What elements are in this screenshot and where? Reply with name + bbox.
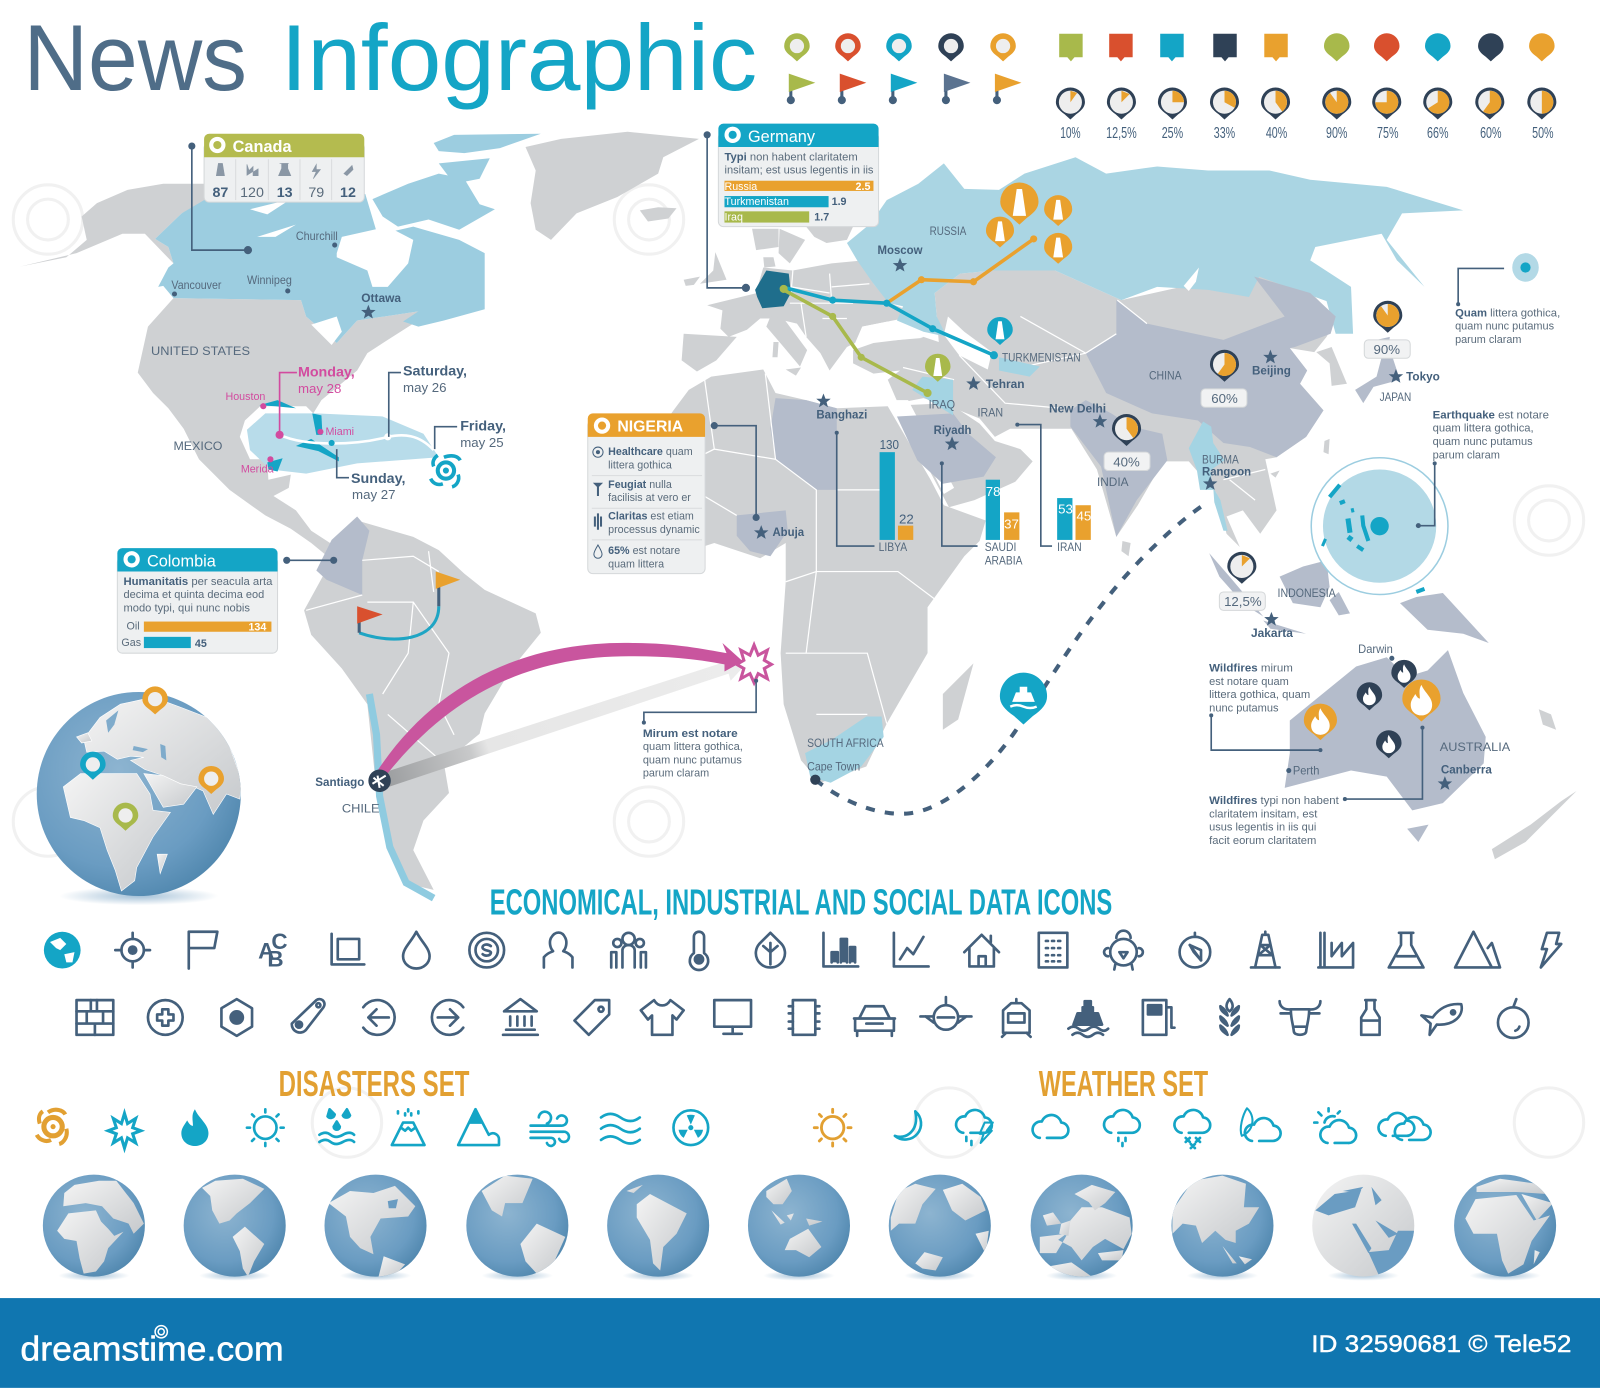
icon: ship pin xyxy=(1000,673,1047,725)
percentage labels xyxy=(1060,125,1554,142)
Wildfires text two: usus legentis in iis qui xyxy=(1209,822,1316,834)
title: Infographic xyxy=(281,5,757,110)
Quam text and marker xyxy=(1455,253,1560,346)
Germany bars: 1.7 xyxy=(814,212,829,224)
Canada header xyxy=(204,134,364,157)
country labels: AUSTRALIA xyxy=(1440,740,1511,754)
icon: car xyxy=(854,1006,895,1036)
Nigeria rows: quam littera xyxy=(608,558,664,570)
Wildfires text two: facit eorum claritatem xyxy=(1209,835,1316,847)
city labels: Houston xyxy=(226,391,265,403)
bar chart: Iran: 45 xyxy=(1077,509,1091,524)
icon: hurricane xyxy=(431,455,460,487)
bar chart: Iran: 53 xyxy=(1058,501,1073,516)
bar chart: Libya: LIBYA xyxy=(879,540,908,554)
Mirum text: Mirum est notare xyxy=(643,728,738,740)
country labels: TURKMENISTAN xyxy=(1002,350,1081,364)
Scandinavia xyxy=(752,229,779,250)
icon: chain xyxy=(292,999,324,1033)
icon: factory xyxy=(1318,933,1353,967)
Germany bars: Russia xyxy=(724,181,757,193)
grey straight arrow xyxy=(381,653,745,788)
country labels: RUSSIA xyxy=(930,224,967,238)
icon: target xyxy=(115,933,150,967)
dashed ship route xyxy=(815,505,1203,814)
percentage labels: 12,5% xyxy=(1106,125,1137,142)
Wildfires text one: est notare quam xyxy=(1209,676,1289,688)
bar chart: Iran: IRAN xyxy=(1057,540,1082,554)
Mirum text: parum claram xyxy=(643,768,709,780)
Nigeria rows xyxy=(592,446,702,570)
icon: bar chart xyxy=(823,933,858,966)
bar chart: Libya xyxy=(835,431,914,554)
Monday label: Monday, xyxy=(298,365,355,381)
Nigeria rows: littera gothica xyxy=(608,459,672,471)
Korea xyxy=(1316,347,1347,386)
globe: Europe xyxy=(1031,1175,1133,1281)
New Zealand xyxy=(1492,791,1577,859)
Colombia bars: 45 xyxy=(195,638,207,650)
map pie pins with values xyxy=(1104,301,1410,610)
percentage labels: 33% xyxy=(1214,125,1235,142)
Wildfires text two: Wildfires typi non habent xyxy=(1209,795,1340,807)
icon: globe xyxy=(44,932,81,968)
city labels: Rangoon xyxy=(1202,466,1251,479)
icon: house xyxy=(964,935,999,966)
Russia highlighted xyxy=(847,157,1463,337)
icon: fuel pump xyxy=(1143,1000,1174,1035)
percentage labels: 60% xyxy=(1480,125,1502,142)
icon: wheat xyxy=(1220,999,1239,1035)
icon: thunderstorm xyxy=(956,1110,993,1145)
Quam text and marker: Quam littera gothica, xyxy=(1455,307,1560,319)
land: grey continents xyxy=(20,132,1577,890)
Germany bars: 1.9 xyxy=(832,196,847,208)
Quam text and marker: quam nunc putamus xyxy=(1455,321,1554,333)
pink curved arrow xyxy=(378,643,743,780)
percentage labels: 50% xyxy=(1532,125,1554,142)
icon: bottle xyxy=(1361,1000,1380,1035)
globe: Africa xyxy=(1454,1175,1556,1281)
icon: apple xyxy=(1498,999,1529,1038)
filled drop markers xyxy=(1324,33,1555,61)
icon: thermometer xyxy=(690,932,708,970)
icon: double cloud xyxy=(1379,1113,1431,1140)
hurricane track xyxy=(226,364,506,502)
country labels: UNITED STATES xyxy=(151,344,250,358)
Germany callout: insitam; est usus legentis in iis xyxy=(724,165,874,177)
icon: hexagon xyxy=(221,999,252,1036)
icon: waves xyxy=(601,1114,640,1143)
icon: moon cloud xyxy=(1241,1108,1281,1141)
icon: cloud xyxy=(1033,1115,1068,1138)
icon: cow xyxy=(1280,1001,1320,1035)
city labels: Tehran xyxy=(986,378,1024,391)
Colombia bars: Gas xyxy=(121,637,141,649)
Saturday label: may 26 xyxy=(403,380,447,395)
country labels: SOUTH AFRICA xyxy=(807,736,884,750)
Canada highlighted xyxy=(155,134,541,343)
icon: train xyxy=(1002,999,1031,1037)
globe: North America xyxy=(324,1175,427,1281)
Germany bars: Iraq xyxy=(724,212,743,224)
Germany header xyxy=(718,124,879,147)
Hudson Bay and lakes xyxy=(250,199,413,345)
percentage labels: 25% xyxy=(1162,125,1183,142)
percentage pie pins xyxy=(1056,87,1556,119)
Mirum text xyxy=(642,679,758,780)
Colombia header: Colombia xyxy=(147,552,217,570)
capital stars xyxy=(361,258,1452,790)
Germany callout xyxy=(704,124,879,292)
Nigeria header xyxy=(588,413,705,437)
Germany panel body xyxy=(718,133,879,227)
country labels: CHINA xyxy=(1149,369,1182,383)
Canada stats: 79 xyxy=(308,185,324,201)
percentage labels: 40% xyxy=(1266,125,1288,142)
icon: hurricane xyxy=(37,1110,67,1144)
route flags South America xyxy=(357,572,460,639)
icon: lightning xyxy=(1541,933,1561,967)
footer logo mark xyxy=(155,1326,167,1338)
Canada stats: 120 xyxy=(240,185,264,201)
icon: airplane xyxy=(920,997,971,1030)
seas cut from land xyxy=(855,316,992,494)
Mirum text: quam nunc putamus xyxy=(643,754,742,766)
icon: alarm clock xyxy=(1104,931,1143,970)
Earthquake text: parum claram xyxy=(1433,449,1500,461)
icon: line chart xyxy=(894,933,929,966)
Canada header: Canada xyxy=(233,138,293,156)
Germany text: Typi non habent claritatem xyxy=(724,151,858,163)
footer id: ID 32590681 © Tele52 xyxy=(1311,1331,1571,1358)
city labels: Churchill xyxy=(296,229,338,243)
globe: Middle East xyxy=(1312,1175,1416,1281)
Saturday label: Saturday, xyxy=(403,364,467,380)
icon: snow xyxy=(1174,1110,1210,1148)
small globes row xyxy=(43,1175,1556,1281)
country labels: INDONESIA xyxy=(1278,586,1336,600)
footer xyxy=(0,1298,1600,1388)
globe: Americas xyxy=(184,1175,286,1281)
Chile xyxy=(369,694,434,898)
Nigeria rows: 65% est notare xyxy=(608,545,680,557)
Nigeria rows: Healthcare quam xyxy=(608,446,693,458)
icon: letters: B xyxy=(267,946,284,971)
Colombia header xyxy=(117,548,278,572)
Earthquake text: quam nunc putamus xyxy=(1433,436,1533,448)
Wildfires text two xyxy=(1209,726,1424,847)
country labels: INDIA xyxy=(1097,475,1129,489)
icon: mountain xyxy=(1455,932,1500,967)
Canada stats: 12 xyxy=(340,185,356,201)
Monday label: may 28 xyxy=(298,381,341,396)
Canada panel body xyxy=(204,143,364,202)
icon: avalanche xyxy=(458,1109,499,1145)
icon: wind xyxy=(531,1112,569,1146)
map pie pins with values: 60% xyxy=(1211,391,1238,406)
Friday label: may 25 xyxy=(460,435,504,450)
outline location pins xyxy=(784,33,1016,61)
percentage labels: 10% xyxy=(1060,125,1081,142)
bar chart: Libya: 130 xyxy=(880,437,899,452)
Nigeria header: NIGERIA xyxy=(617,419,683,436)
icon: explosion xyxy=(108,1113,141,1148)
bar chart: Saudi Arabia: SAUDI xyxy=(985,540,1016,554)
icon: sun cloud xyxy=(1314,1108,1356,1143)
country labels xyxy=(151,224,1511,815)
Earthquake text: quam littera gothica, xyxy=(1433,423,1534,435)
icon: leaf xyxy=(756,933,785,967)
icon: chip xyxy=(789,1000,819,1035)
bar chart: Saudi Arabia: 37 xyxy=(1004,517,1019,532)
percentage labels: 75% xyxy=(1377,125,1399,142)
Sunday label: may 27 xyxy=(352,487,395,502)
Germany header: Germany xyxy=(748,128,816,146)
Germany bars: 2.5 xyxy=(856,181,870,193)
Wildfires text one: nunc putamus xyxy=(1209,702,1279,714)
Saturday label xyxy=(389,364,467,437)
icon: t-shirt xyxy=(641,1000,684,1035)
icon: radiation xyxy=(673,1110,708,1145)
Friday label: Friday, xyxy=(460,419,506,435)
Turkmenistan, Iraq, Burma highlighted xyxy=(805,357,1228,783)
icon: money xyxy=(469,933,504,967)
Asia and Turkey base xyxy=(853,271,1337,547)
Germany xyxy=(755,271,791,308)
city labels: Ottawa xyxy=(361,292,402,305)
map pie pins with values: 90% xyxy=(1373,342,1400,357)
Wildfires text one: Wildfires mirum xyxy=(1209,663,1293,675)
globe: South America xyxy=(607,1175,709,1281)
Colombia panel xyxy=(117,548,337,653)
city labels: Darwin xyxy=(1358,642,1393,656)
icon: left arrow xyxy=(363,1000,395,1035)
disasters icons xyxy=(37,1109,708,1148)
city labels: Perth xyxy=(1293,764,1320,778)
globe pins xyxy=(80,686,224,831)
icon: water drop xyxy=(403,932,430,968)
icon: moon xyxy=(895,1111,921,1140)
icon: explosion star xyxy=(737,645,771,683)
icon: flood xyxy=(319,1109,354,1144)
city labels: Riyadh xyxy=(934,424,971,437)
icon: bricks xyxy=(77,1000,113,1035)
Sunday label xyxy=(337,449,405,502)
icon: volcano xyxy=(392,1109,424,1145)
title: News xyxy=(23,5,247,110)
bar chart: Libya: 22 xyxy=(899,512,914,527)
Canada callout xyxy=(188,134,364,254)
heading: disasters: DISASTERS SET xyxy=(279,1064,470,1104)
city labels xyxy=(171,229,1492,789)
icon: ship xyxy=(1068,1001,1108,1037)
Colombia text: Humanitatis per seacula arta xyxy=(123,576,272,588)
France xyxy=(707,293,760,337)
Germany bars xyxy=(724,181,873,224)
city labels: Tokyo xyxy=(1406,371,1440,384)
Germany bars: Turkmenistan xyxy=(724,196,789,208)
Italy xyxy=(766,316,807,366)
pipelines xyxy=(780,235,1037,397)
globe: Pacific xyxy=(889,1175,991,1281)
globe: Asia xyxy=(1171,1175,1273,1281)
city labels xyxy=(226,391,354,476)
Nigeria rows: processus dynamic xyxy=(608,524,700,536)
square markers xyxy=(1059,34,1288,61)
percentage labels: 66% xyxy=(1427,125,1449,142)
city labels: Abuja xyxy=(772,526,805,539)
icon: fish xyxy=(1421,1004,1462,1035)
Earthquake text xyxy=(1416,409,1549,528)
Sunday label: Sunday, xyxy=(351,471,405,487)
Mirum text: quam littera gothica, xyxy=(643,741,743,753)
icon row one xyxy=(44,929,1561,971)
city labels: Santiago xyxy=(315,776,364,789)
Colombia bars: Oil xyxy=(127,621,140,633)
oil pins xyxy=(925,183,1072,382)
icon: flag xyxy=(189,932,217,968)
icon row two xyxy=(77,997,1529,1038)
Colombia text: modo typi, qui nunc nobis xyxy=(123,602,250,614)
globe inland seas xyxy=(106,710,166,760)
highlighted darker countries xyxy=(316,277,1489,842)
percentage labels: 90% xyxy=(1326,125,1348,142)
bar chart: Saudi Arabia: 78 xyxy=(986,484,1000,499)
flag markers xyxy=(788,74,1021,103)
icon: building xyxy=(1039,933,1067,967)
icon: tag xyxy=(574,1000,609,1035)
city labels: Banghazi xyxy=(816,408,867,421)
Colombia bars xyxy=(121,621,271,650)
city labels: Winnipeg xyxy=(247,273,292,287)
borders xyxy=(306,271,1265,763)
Spain xyxy=(682,334,737,372)
icon: crop xyxy=(332,934,364,964)
icon: person xyxy=(544,933,572,967)
city labels: Moscow xyxy=(878,244,923,257)
icon: fire xyxy=(181,1109,208,1146)
city labels: Beijing xyxy=(1252,365,1291,378)
earthquake circle xyxy=(1311,458,1448,595)
globe: Europe and Africa xyxy=(43,1175,145,1281)
icon: right arrow xyxy=(432,1000,463,1035)
weather icons xyxy=(814,1108,1431,1148)
icon: letters: A xyxy=(258,938,274,963)
city labels: Miami xyxy=(326,426,354,438)
city labels: Cape Town xyxy=(807,760,860,774)
globe: Australia and Asia xyxy=(748,1175,850,1281)
country labels: BURMA xyxy=(1202,452,1239,466)
globe: Central America xyxy=(466,1175,568,1281)
bar chart: Iran xyxy=(1015,423,1091,554)
country labels: IRAN xyxy=(978,405,1003,419)
Quam text and marker: parum claram xyxy=(1455,334,1521,346)
Nigeria rows: facilisis at vero er xyxy=(608,492,691,504)
city labels: New Delhi xyxy=(1049,402,1106,415)
icon: sun xyxy=(814,1109,851,1146)
Canada stats: 13 xyxy=(277,185,293,201)
icon: Cape Town marker xyxy=(810,775,820,785)
wildfire pins Australia xyxy=(1304,660,1441,758)
icon: Santiago airport xyxy=(368,770,391,792)
Nigeria rows: Claritas est etiam xyxy=(608,511,694,523)
Colombia text: decima et quinta decima eod xyxy=(123,589,264,601)
map pie pins with values: 40% xyxy=(1113,454,1140,469)
country labels: MEXICO xyxy=(173,439,222,453)
city labels: Jakarta xyxy=(1251,627,1293,640)
Central and Eastern Europe xyxy=(755,260,903,371)
icon: letters xyxy=(258,929,288,971)
icon: people xyxy=(611,933,646,967)
Canada stats xyxy=(212,159,356,201)
city labels: Merida xyxy=(241,464,274,476)
Nigeria rows: Feugiat nulla xyxy=(608,479,672,491)
Monday label xyxy=(276,365,355,439)
UK and Ireland xyxy=(700,252,727,284)
Nigeria panel xyxy=(588,413,760,574)
Colombia bars: 134 xyxy=(248,622,266,634)
heading: weather: WEATHER SET xyxy=(1039,1064,1208,1104)
heading: economical: ECONOMICAL, INDUSTRIAL AND SOCIAL DATA ICONS xyxy=(490,882,1112,922)
icon: rain xyxy=(1104,1110,1140,1146)
Colombia text xyxy=(123,576,272,614)
world map xyxy=(20,132,1577,898)
city labels: Canberra xyxy=(1441,764,1492,777)
icon: letters: C xyxy=(271,929,288,954)
map pie pins with values: 12,5% xyxy=(1224,594,1262,609)
footer logo: dreamstime.com xyxy=(20,1330,284,1368)
Wildfires text one: littera gothica, quam xyxy=(1209,689,1310,701)
icon: medical xyxy=(148,1000,183,1035)
country labels: CHILE xyxy=(342,801,380,815)
icon: flask xyxy=(1389,933,1423,967)
Friday label xyxy=(435,419,506,450)
bar chart: Saudi Arabia: ARABIA xyxy=(985,553,1023,567)
Wildfires text one xyxy=(1209,663,1322,752)
city labels: Vancouver xyxy=(171,278,221,292)
city dots xyxy=(172,242,1394,773)
icon: oil derrick xyxy=(1251,932,1280,967)
icon: monitor xyxy=(714,1000,751,1034)
icon: heat sun xyxy=(247,1109,284,1146)
icon: compass xyxy=(1180,933,1210,967)
country labels: JAPAN xyxy=(1380,390,1411,404)
bar chart: Saudi Arabia xyxy=(940,461,1023,567)
icon: bank xyxy=(503,999,538,1035)
Earthquake text: Earthquake est notare xyxy=(1433,409,1549,421)
country labels: IRAQ xyxy=(929,397,955,411)
Wildfires text two: claritatem insitam, est xyxy=(1209,808,1318,820)
title xyxy=(23,5,757,110)
Canada stats: 87 xyxy=(212,185,228,201)
big globe xyxy=(37,686,242,905)
